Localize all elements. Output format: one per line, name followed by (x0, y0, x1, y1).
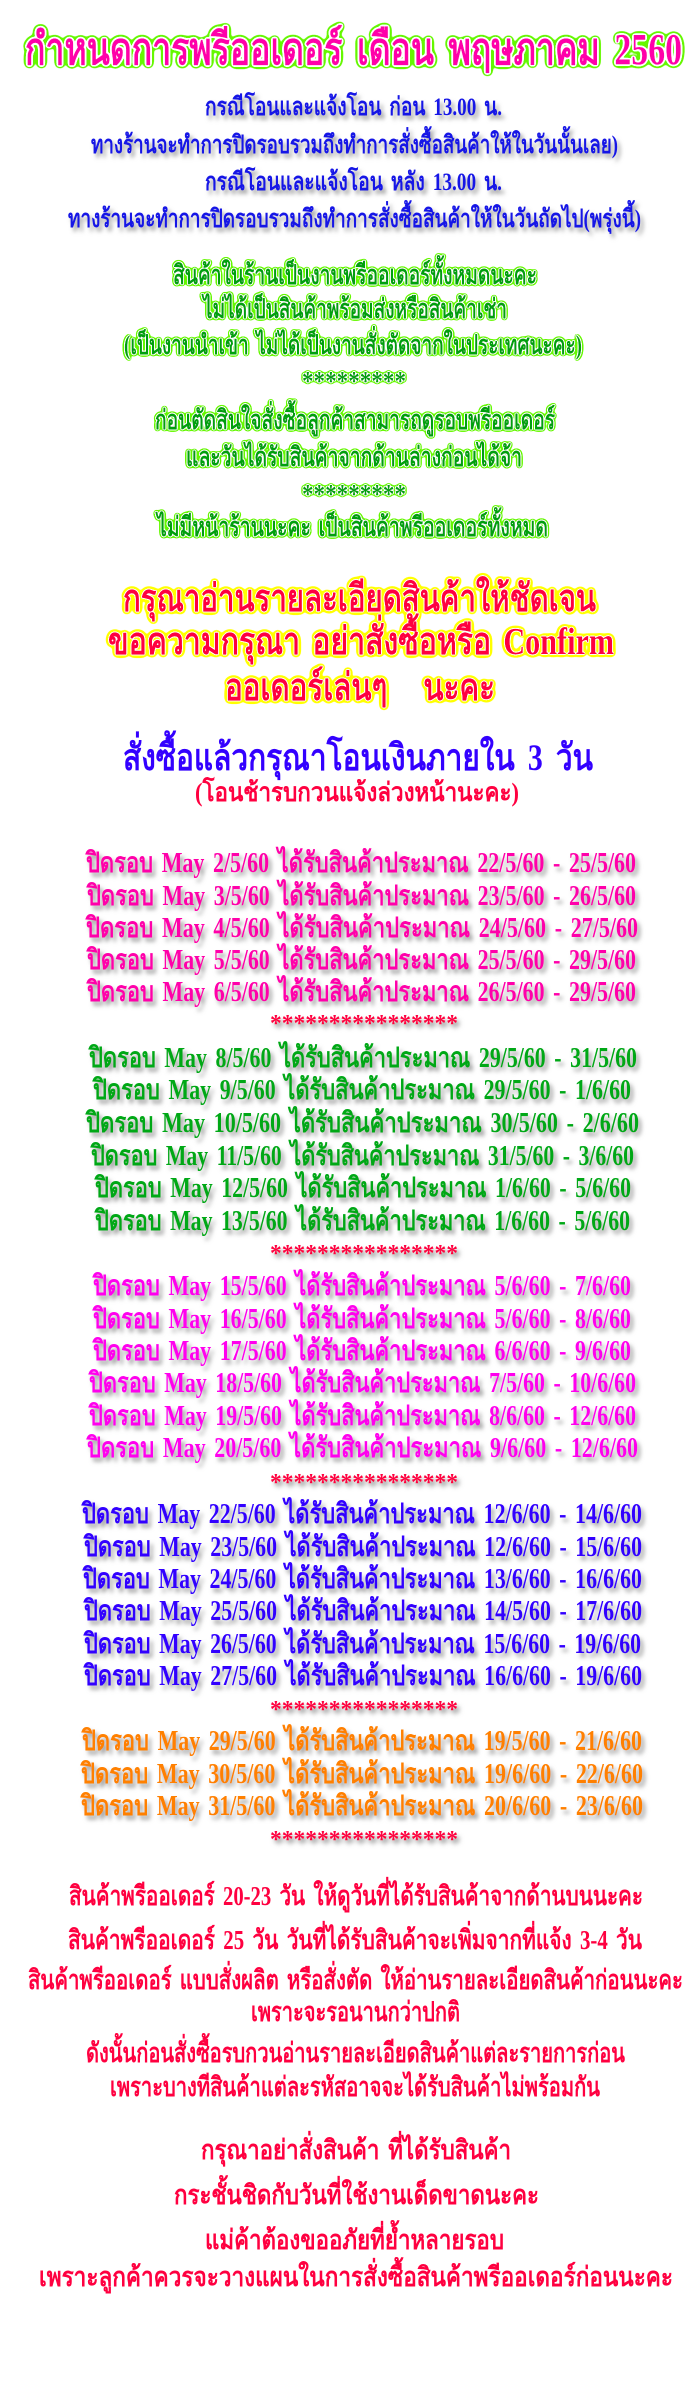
callout: please read details: ออเดอร์เล่นๆ นะคะ (225, 666, 495, 709)
separator stars: **************** (270, 1827, 458, 1853)
heading: payment within 3 days: สั่งซื้อแล้วกรุณาโอนเงินภายใน 3 วัน (123, 730, 593, 781)
separator stars: **************** (270, 1470, 458, 1496)
round group: May 29-31 in orange (79, 1724, 643, 1822)
callout: please read details (108, 576, 614, 709)
cut-off after 13:00: กรณีโอนและแจ้งโอน หลัง 13.00 น. (205, 166, 502, 196)
heading: payment within 3 days: (โอนช้ารบกวนแจ้งล่วงหน้านะคะ) (195, 776, 519, 807)
separator stars: **************** (270, 1241, 458, 1267)
closing note: please plan orders ahead (39, 2130, 673, 2294)
separator stars: **************** (270, 1011, 458, 1037)
cut-off before 13:00: กรณีโอนและแจ้งโอน ก่อน 13.00 น. (205, 91, 502, 121)
closing note: please plan orders ahead: แม่ค้าต้องขออภัยที่ย้ำหลายรอบ (205, 2219, 504, 2255)
text block: transfer cut-off times (68, 91, 641, 235)
closing note: please plan orders ahead: กรุณาอย่าสั่งสินค้า ที่ได้รับสินค้า (201, 2130, 511, 2167)
schedule: closing rounds and delivery dates (79, 846, 643, 1853)
closing note: please plan orders ahead: กระชั้นชิดกับวันที่ใช้งานเด็ดขาดนะคะ (174, 2174, 539, 2210)
round group: May 2-6 in pink (84, 846, 638, 1008)
separator stars: **************** (270, 1697, 458, 1723)
text block: pre-order notice in green: ไม่มีหน้าร้านนะคะ เป็นสินค้าพรีออเดอร์ทั้งหมด (155, 506, 548, 542)
cut-off before 13:00 (91, 91, 618, 159)
round group: May 15-20 in magenta (85, 1269, 638, 1464)
text block: pre-order notice in green: สินค้าในร้านเป็นงานพรีออเดอร์ทั้งหมดนะคะ (173, 254, 537, 290)
cut-off after 13:00 (68, 166, 641, 235)
notes: pre-order delivery details (28, 1876, 683, 2102)
text block: pre-order notice in green: ********* (302, 366, 406, 396)
text block: pre-order notice in green: และวันได้รับสินค้าจากด้านล่างก่อนได้จ้า (186, 441, 522, 472)
round group: May 8-13 in green (84, 1041, 639, 1237)
text block: pre-order notice in green (124, 254, 582, 542)
text block: pre-order notice in green: ไม่ได้เป็นสินค้าพร้อมส่งหรือสินค้าเช่า (201, 291, 507, 324)
heading: payment within 3 days (123, 730, 593, 807)
notes: pre-order delivery details: เพราะจะรอนานกว่าปกติ (251, 1997, 460, 2027)
text block: pre-order notice in green: ********* (302, 479, 406, 509)
round group: May 22-27 in blue (80, 1497, 642, 1692)
